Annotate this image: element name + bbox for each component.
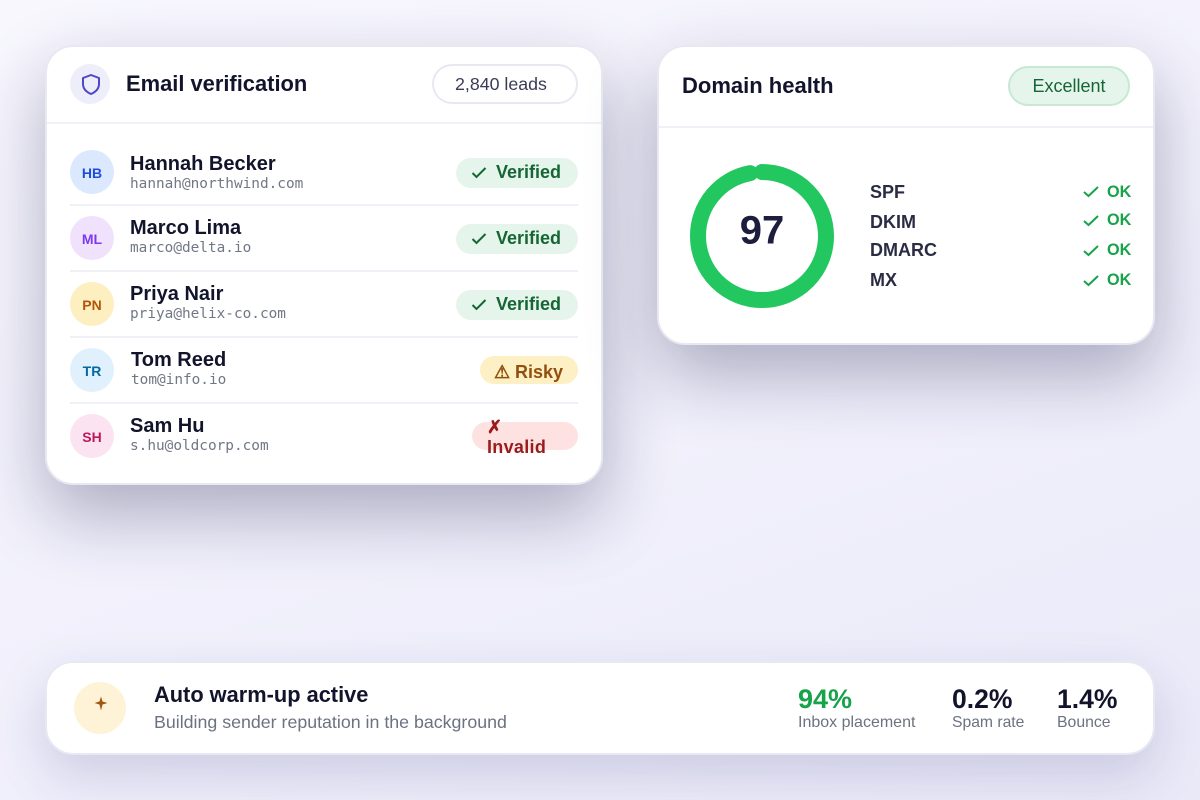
row: Hannah Becker: Verified — [496, 162, 561, 182]
row: Priya Nair: PN — [82, 297, 102, 313]
heading: auto warm-up: Auto warm-up active — [154, 682, 368, 707]
check list: DKIM: DKIM — [870, 212, 916, 232]
row: Tom Reed: tom@info.io — [131, 372, 226, 388]
stat: spam rate — [952, 684, 1024, 731]
status: DMARC ok: OK — [1107, 241, 1131, 259]
panel: domain health — [657, 45, 1155, 345]
check list: SPF: SPF — [870, 182, 905, 202]
badge: excellent: Excellent — [1032, 76, 1106, 96]
row: Hannah Becker — [70, 150, 578, 194]
status: MX ok: OK — [1107, 271, 1131, 289]
stat: bounce: Bounce — [1057, 714, 1111, 731]
donut score chart — [690, 164, 834, 308]
row: Priya Nair: priya@helix-co.com — [130, 306, 286, 322]
row: Hannah Becker: Hannah Becker — [130, 153, 276, 175]
subtext: warm-up: Building sender reputation in the background — [154, 712, 507, 732]
icon: sparkle — [74, 682, 126, 734]
row: Tom Reed: TR — [83, 363, 101, 379]
row: Sam Hu: Sam Hu — [130, 415, 204, 437]
stat: spam rate: Spam rate — [952, 714, 1024, 731]
row: Hannah Becker: hannah@northwind.com — [130, 176, 303, 192]
row: Marco Lima: marco@delta.io — [130, 240, 251, 256]
row: Sam Hu: s.hu@oldcorp.com — [130, 438, 269, 454]
stat: inbox placement — [798, 684, 916, 731]
row: Marco Lima: Marco Lima — [130, 217, 241, 239]
donut score chart: 97 — [740, 208, 784, 252]
status: DMARC ok — [1083, 241, 1132, 259]
stat: bounce: 1.4% — [1057, 684, 1117, 714]
row: Tom Reed: Risky — [515, 362, 563, 382]
heading: domain health: Domain health — [682, 73, 834, 98]
row: Sam Hu: SH — [82, 429, 102, 445]
row: Marco Lima: ML — [82, 231, 102, 247]
icon: shield — [70, 64, 110, 104]
row: Sam Hu: ✗ Invalid — [487, 417, 546, 457]
stat: inbox placement: 94% — [798, 684, 852, 714]
row: Sam Hu — [70, 414, 578, 458]
row: Hannah Becker: HB — [82, 165, 102, 181]
row: Marco Lima: Verified — [496, 228, 561, 248]
badge: lead count: 2,840 leads — [455, 74, 547, 94]
heading: email verification: Email verification — [126, 71, 307, 96]
stat: spam rate: 0.2% — [952, 684, 1012, 714]
row: Priya Nair — [70, 282, 578, 326]
row: Marco Lima — [70, 216, 578, 260]
status: SPF ok: OK — [1107, 183, 1131, 201]
check list: MX: MX — [870, 270, 897, 290]
panel: auto warm-up — [45, 661, 1155, 755]
badge: excellent — [1008, 66, 1130, 106]
stat: bounce — [1057, 684, 1117, 731]
row: Priya Nair: Priya Nair — [130, 283, 223, 305]
panel: email verification — [45, 45, 603, 485]
status: SPF ok — [1083, 183, 1132, 201]
row: Tom Reed: Tom Reed — [131, 349, 226, 371]
status: MX ok — [1083, 271, 1132, 289]
badge: lead count — [432, 64, 578, 104]
status: DKIM ok — [1083, 211, 1132, 229]
row: Tom Reed — [70, 348, 578, 392]
check list: DMARC: DMARC — [870, 240, 937, 260]
row: Tom Reed: ⚠ — [494, 362, 510, 382]
stat: inbox placement: Inbox placement — [798, 714, 915, 731]
row: Priya Nair: Verified — [496, 294, 561, 314]
status: DKIM ok: OK — [1107, 211, 1131, 229]
